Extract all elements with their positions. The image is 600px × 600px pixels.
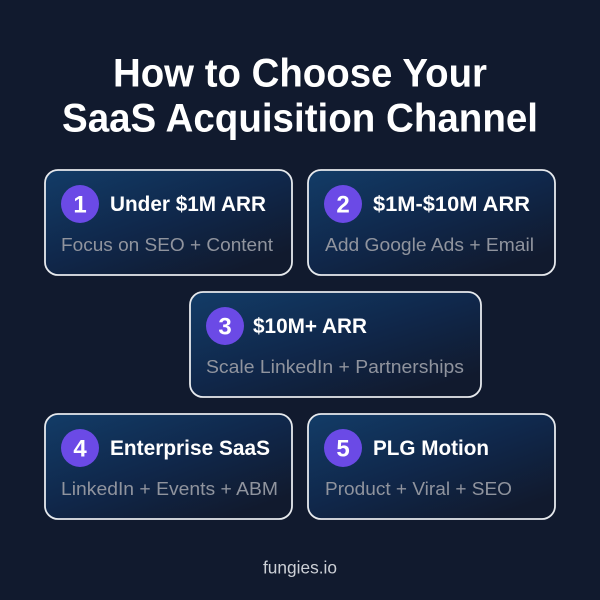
card 4 text: LinkedIn + Events + ABM bbox=[61, 478, 278, 499]
panel: card 1 bbox=[45, 170, 292, 275]
panel: card 3 bbox=[190, 292, 481, 397]
icon: number 3 badge: 3 bbox=[218, 314, 232, 340]
card 3 text: Scale LinkedIn + Partnerships bbox=[206, 356, 464, 377]
panel: card 2 bbox=[308, 170, 555, 275]
card 1 text: Focus on SEO + Content bbox=[61, 234, 273, 255]
icon: number 4 badge: 4 bbox=[73, 436, 87, 462]
icon: number 2 badge bbox=[324, 185, 362, 223]
icon: number 1 badge bbox=[61, 185, 99, 223]
icon: number 5 badge bbox=[324, 429, 362, 467]
icon: number 3 badge bbox=[206, 307, 244, 345]
icon: number 1 badge: 1 bbox=[73, 192, 87, 218]
title: SaaS Acquisition Channel bbox=[62, 96, 538, 140]
card 3 heading: $10M+ ARR bbox=[253, 315, 367, 338]
panel: card 5 bbox=[308, 414, 555, 519]
panel: card 4 bbox=[45, 414, 292, 519]
card 2 heading: $1M-$10M ARR bbox=[373, 193, 530, 216]
icon: number 5 badge: 5 bbox=[336, 436, 350, 462]
footer brand: fungies.io bbox=[263, 558, 337, 578]
card 4 heading: Enterprise SaaS bbox=[110, 437, 270, 460]
icon: number 2 badge: 2 bbox=[336, 192, 350, 218]
card 5 heading: PLG Motion bbox=[373, 437, 489, 460]
title bbox=[62, 52, 538, 140]
icon: number 4 badge bbox=[61, 429, 99, 467]
card 5 text: Product + Viral + SEO bbox=[325, 478, 512, 499]
title: How to Choose Your bbox=[113, 52, 487, 96]
card 1 heading: Under $1M ARR bbox=[110, 193, 266, 216]
card 2 text: Add Google Ads + Email bbox=[325, 234, 534, 255]
